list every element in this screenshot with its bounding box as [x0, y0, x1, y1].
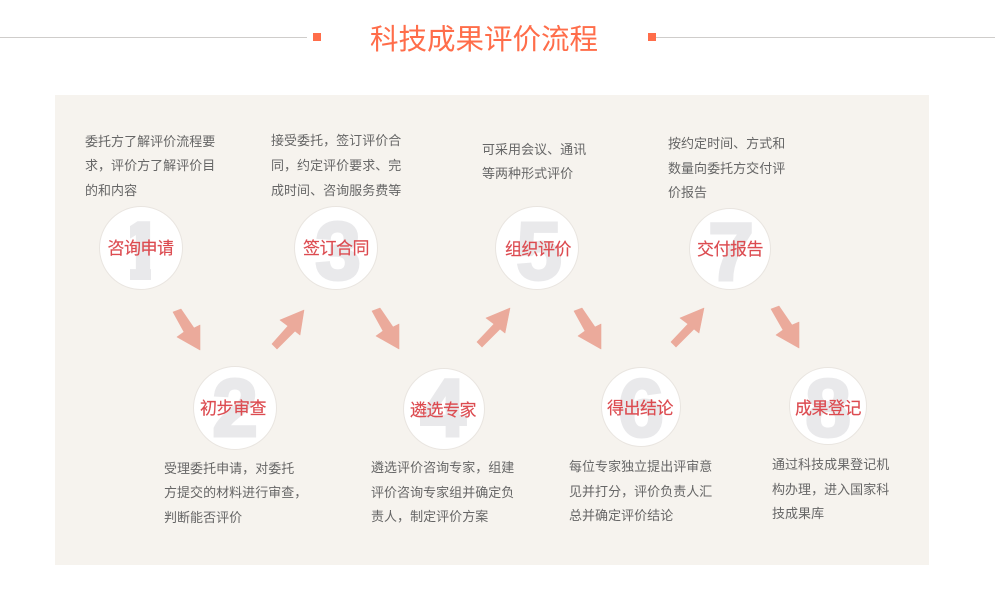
step 4 description: 责人，制定评价方案 [371, 509, 488, 524]
arrow: step 4 to 5 [477, 308, 510, 347]
step 7 number: 7 [708, 207, 754, 298]
step 6 description: 见并打分，评价负责人汇 [569, 484, 712, 499]
step 2 circle [194, 366, 276, 450]
step 8 [772, 363, 889, 521]
arrow: step 2 to 3 [272, 310, 304, 349]
step 1 circle [100, 206, 182, 290]
step 3 number: 3 [315, 206, 361, 297]
step 7 circle [690, 208, 770, 290]
step 3 description: 接受委托，签订评价合 [271, 133, 401, 148]
step 6 description: 总并确定评价结论 [569, 508, 673, 523]
step 1 description: 的和内容 [85, 183, 137, 198]
step 4 label: 遴选专家 [410, 401, 476, 420]
step 8 description: 通过科技成果登记机 [772, 457, 889, 472]
step 6 label: 得出结论 [607, 399, 673, 418]
step 1 description: 委托方了解评价流程要 [85, 134, 215, 149]
step 4 number: 4 [420, 363, 466, 454]
step 5 number: 5 [516, 206, 562, 297]
arrow: step 1 to 2 [173, 309, 200, 350]
step 3 circle [294, 206, 378, 290]
step 3 label: 签订合同 [303, 239, 369, 258]
step 8 description: 技成果库 [772, 506, 824, 521]
step 1 number: 1 [118, 206, 164, 297]
step 7 description: 价报告 [668, 185, 707, 200]
arrow: step 5 to 6 [574, 308, 601, 349]
step 8 label: 成果登记 [795, 399, 861, 418]
right title marker [648, 33, 656, 41]
step 4 description: 评价咨询专家组并确定负 [371, 485, 514, 500]
step 3 description: 成时间、咨询服务费等 [271, 183, 401, 198]
step 2 description: 方提交的材料进行审查， [164, 485, 307, 500]
step 2 [164, 363, 307, 525]
step 7 [668, 136, 785, 298]
step 2 label: 初步审查 [200, 399, 266, 418]
step 5 circle [496, 206, 578, 290]
title: 科技成果评价流程 [370, 24, 598, 56]
step 4 description: 遴选评价咨询专家，组建 [371, 460, 514, 475]
step 6 number: 6 [618, 363, 664, 454]
step 7 label: 交付报告 [697, 240, 763, 259]
step 4 circle [404, 368, 484, 450]
step 3 description: 同，约定评价要求、完 [271, 158, 401, 173]
step 2 description: 受理委托申请，对委托 [164, 461, 294, 476]
arrow: step 6 to 7 [671, 308, 704, 347]
title header [0, 24, 995, 56]
step 7 description: 按约定时间、方式和 [668, 136, 785, 151]
step 8 description: 构办理，进入国家科 [772, 482, 889, 497]
step 1 description: 求，评价方了解评价目 [85, 158, 215, 173]
step 6 circle [602, 368, 680, 446]
step 2 number: 2 [212, 363, 258, 454]
arrow: step 7 to 8 [771, 306, 799, 348]
step 1 label: 咨询申请 [108, 239, 174, 258]
step 6 description: 每位专家独立提出评审意 [569, 459, 712, 474]
panel: process background [55, 95, 929, 565]
step 2 description: 判断能否评价 [164, 510, 242, 525]
step 5 [482, 142, 586, 297]
arrow: step 3 to 4 [372, 308, 399, 349]
step 5 description: 可采用会议、通讯 [482, 142, 586, 157]
step 4 [371, 363, 514, 524]
step 6 [569, 363, 712, 523]
left title marker [313, 33, 321, 41]
step 3 [271, 133, 401, 297]
step 7 description: 数量向委托方交付评 [668, 161, 785, 176]
step 5 label: 组织评价 [505, 240, 571, 259]
step 8 number: 8 [805, 363, 851, 454]
step 1 [85, 134, 215, 297]
step 8 circle [790, 368, 866, 444]
step 5 description: 等两种形式评价 [482, 166, 573, 181]
